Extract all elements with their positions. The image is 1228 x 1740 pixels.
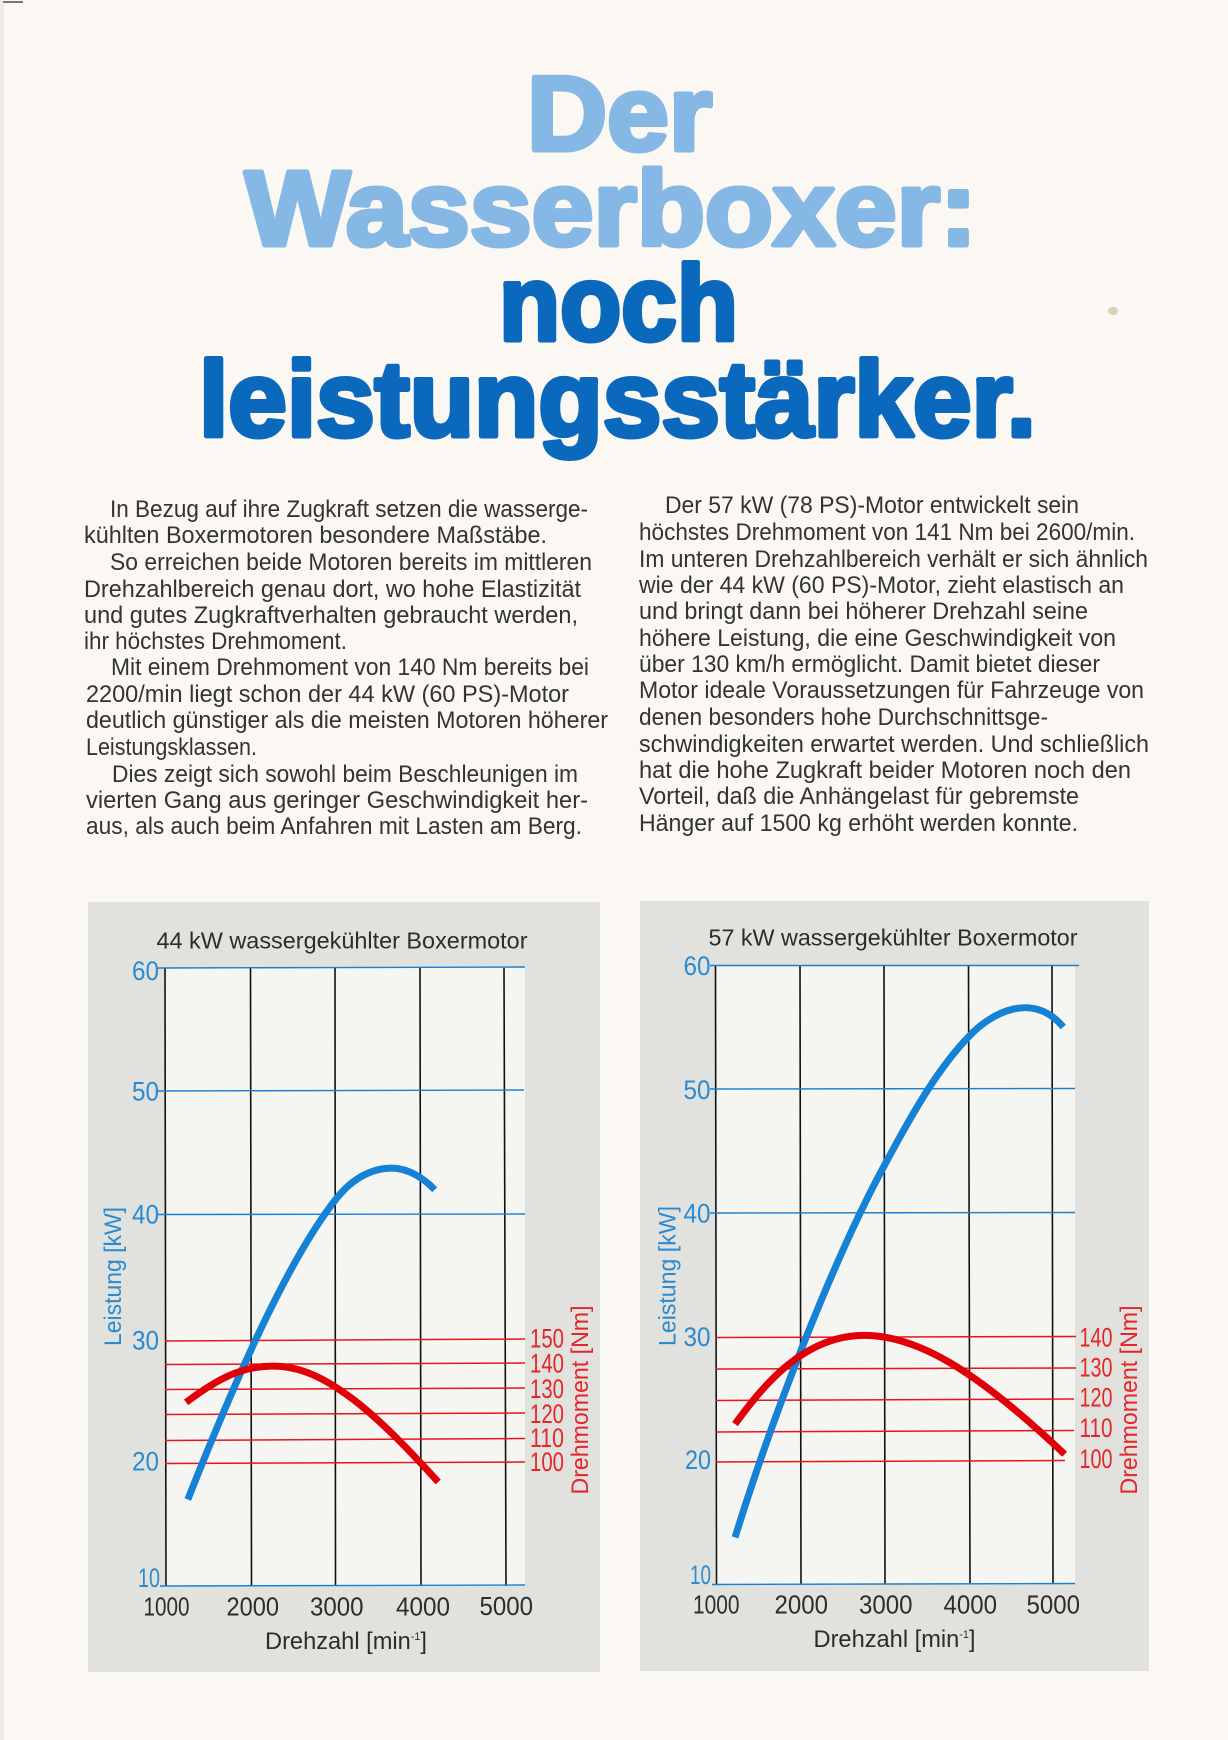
- torque axis labels: 140: [530, 1348, 564, 1378]
- torque curve: [186, 1366, 438, 1482]
- text block: right column: Der 57 kW (78 PS)-Motor entwickelt sein: [665, 492, 1079, 519]
- plot area: [715, 966, 1075, 1584]
- x axis title: -1: [411, 1631, 420, 1643]
- power curve: [188, 1168, 435, 1500]
- power axis labels: 40: [684, 1198, 710, 1228]
- text block: left column: Leistungsklassen.: [86, 734, 257, 761]
- title: Wasserboxer:: [245, 150, 977, 268]
- x axis title: -1: [959, 1629, 969, 1641]
- y axis title: power: Leistung [kW]: [100, 1207, 127, 1346]
- power axis labels: 60: [132, 956, 159, 986]
- y axis title: torque: Drehmoment [Nm]: [567, 1306, 594, 1494]
- text block: right column: Hänger auf 1500 kg erhöht werden konnte.: [639, 810, 1078, 837]
- text block: left column: und gutes Zugkraftverhalten gebraucht werden,: [84, 602, 578, 629]
- power axis labels: 20: [685, 1445, 711, 1475]
- power axis labels: 30: [132, 1326, 159, 1356]
- text block: left column: aus, als auch beim Anfahren mit Lasten am Berg.: [86, 813, 582, 840]
- rpm axis labels: 5000: [480, 1591, 533, 1621]
- title: leistungsstärker.: [199, 339, 1036, 459]
- text block: right column: denen besonders hohe Durchschnittsge-: [639, 704, 1048, 731]
- text block: left column: ihr höchstes Drehmoment.: [84, 628, 347, 655]
- text block: right column: und bringt dann bei höherer Drehzahl seine: [639, 598, 1088, 625]
- power axis labels: 60: [684, 951, 710, 981]
- power axis labels: 40: [132, 1200, 159, 1230]
- chart title: 44 kW wassergekühlter Boxermotor: [156, 928, 528, 954]
- panel: 57 kW chart: [640, 901, 1149, 1671]
- rpm axis labels: 4000: [396, 1592, 450, 1622]
- text block: right column: höchstes Drehmoment von 141 Nm bei 2600/min.: [639, 519, 1135, 546]
- power curve: [735, 1008, 1063, 1537]
- text block: left column: vierten Gang aus geringer Geschwindigkeit her-: [86, 787, 588, 814]
- power axis labels: 10: [690, 1560, 711, 1590]
- grid lines: [710, 966, 1079, 1584]
- torque axis labels: 110: [530, 1423, 564, 1453]
- text block: left column: [84, 496, 608, 840]
- rpm axis labels: 2000: [774, 1590, 828, 1620]
- text block: left column: In Bezug auf ihre Zugkraft setzen die wasserge-: [110, 496, 588, 523]
- rpm axis labels: 4000: [944, 1590, 997, 1620]
- text block: left column: So erreichen beide Motoren bereits im mittleren: [110, 549, 592, 576]
- rpm axis labels: 5000: [1026, 1590, 1080, 1620]
- rpm axis labels: [144, 1591, 533, 1622]
- x axis title: ]: [420, 1628, 427, 1655]
- power axis labels: 30: [684, 1322, 710, 1352]
- text block: left column: kühlten Boxermotoren besondere Maßstäbe.: [84, 522, 547, 549]
- torque axis labels: 110: [1080, 1413, 1112, 1443]
- torque axis labels: 140: [1080, 1322, 1112, 1352]
- power axis labels: 10: [138, 1563, 160, 1593]
- torque axis labels: [530, 1324, 564, 1477]
- rpm axis labels: 1000: [144, 1592, 190, 1622]
- torque axis labels: 100: [1080, 1444, 1112, 1474]
- y axis title: power: Leistung [kW]: [654, 1206, 682, 1346]
- x axis title: Drehzahl [min: [265, 1628, 413, 1655]
- torque axis labels: [1080, 1322, 1112, 1474]
- panel: 44 kW chart: [88, 902, 600, 1672]
- text block: right column: Motor ideale Voraussetzungen für Fahrzeuge von: [639, 677, 1144, 704]
- power axis labels: 50: [132, 1076, 159, 1106]
- torque axis labels: 120: [530, 1399, 564, 1429]
- text block: left column: Mit einem Drehmoment von 140 Nm bereits bei: [111, 654, 589, 681]
- title: Der: [527, 55, 712, 173]
- power axis labels: [684, 951, 711, 1590]
- torque axis labels: 100: [530, 1447, 564, 1477]
- text block: left column: Dies zeigt sich sowohl beim Beschleunigen im: [112, 761, 578, 788]
- torque axis labels: 120: [1080, 1382, 1112, 1412]
- power axis labels: 50: [684, 1075, 710, 1105]
- text block: right column: Im unteren Drehzahlbereich verhält er sich ähnlich: [639, 546, 1148, 573]
- text block: right column: schwindigkeiten erwartet werden. Und schließlich: [639, 731, 1149, 758]
- rpm axis labels: 1000: [693, 1590, 740, 1620]
- text block: right column: hat die hohe Zugkraft beider Motoren noch den: [639, 757, 1131, 784]
- torque axis labels: 150: [530, 1324, 564, 1354]
- text block: left column: Drehzahlbereich genau dort, wo hohe Elastizität: [84, 576, 581, 603]
- title: [199, 55, 1036, 459]
- y axis title: torque: Drehmoment [Nm]: [1116, 1306, 1143, 1494]
- x axis title: ]: [969, 1626, 976, 1653]
- text block: left column: deutlich günstiger als die meisten Motoren höherer: [86, 707, 608, 734]
- rpm axis labels: 3000: [310, 1592, 364, 1622]
- text block: right column: [638, 492, 1149, 837]
- panel background: [88, 902, 600, 1672]
- grid lines: [158, 967, 525, 1586]
- text block: left column: 2200/min liegt schon der 44 kW (60 PS)-Motor: [86, 681, 569, 708]
- torque axis labels: 130: [1080, 1352, 1112, 1382]
- torque axis labels: 130: [530, 1374, 564, 1404]
- plot area: [165, 968, 525, 1586]
- rpm axis labels: [693, 1590, 1080, 1620]
- chart title: 57 kW wassergekühlter Boxermotor: [708, 924, 1078, 950]
- power axis labels: 20: [132, 1446, 159, 1476]
- panel background: [640, 901, 1149, 1671]
- title: noch: [499, 243, 738, 363]
- text block: right column: über 130 km/h ermöglicht. Damit bietet dieser: [639, 651, 1100, 678]
- x axis title: Drehzahl [min: [814, 1626, 962, 1653]
- rpm axis labels: 2000: [226, 1592, 279, 1622]
- torque curve: [735, 1335, 1065, 1454]
- text block: right column: höhere Leistung, die eine Geschwindigkeit von: [639, 625, 1116, 652]
- text block: right column: wie der 44 kW (60 PS)-Motor, zieht elastisch an: [638, 572, 1124, 599]
- text block: right column: Vorteil, daß die Anhängelast für gebremste: [639, 783, 1079, 810]
- rpm axis labels: 3000: [859, 1590, 912, 1620]
- power axis labels: [132, 956, 160, 1593]
